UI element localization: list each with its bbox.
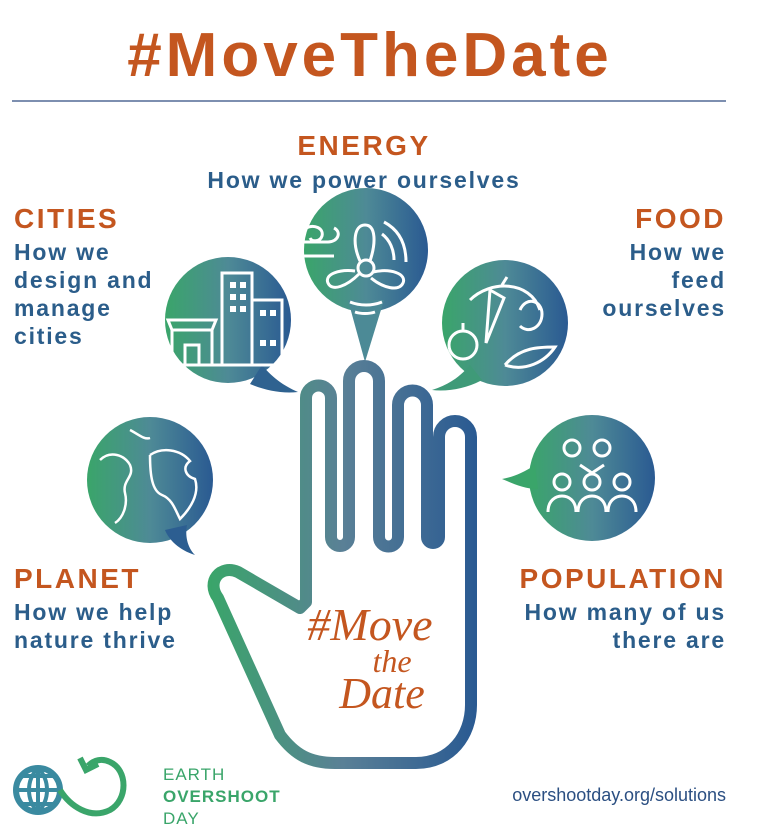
logo icon bbox=[16, 758, 124, 813]
hand slogan: Date bbox=[338, 669, 425, 718]
heading: cities bbox=[14, 203, 153, 349]
heading: cities: CITIES bbox=[14, 203, 119, 234]
heading: population: POPULATION bbox=[520, 563, 726, 594]
hand outline bbox=[214, 366, 471, 763]
bubble: cities bbox=[165, 257, 298, 393]
bubble: planet bbox=[87, 417, 213, 555]
logo text: OVERSHOOT bbox=[163, 787, 281, 806]
heading: population bbox=[520, 563, 726, 653]
url: overshootday.org/solutions bbox=[512, 785, 726, 805]
title: #MoveTheDate bbox=[127, 21, 613, 90]
bubble: energy bbox=[304, 188, 428, 362]
heading: cities: cities bbox=[14, 323, 84, 349]
logo text bbox=[163, 765, 281, 828]
bubble: food bbox=[432, 260, 568, 391]
heading: food: ourselves bbox=[602, 295, 726, 321]
hand slogan bbox=[307, 599, 433, 718]
heading: cities: manage bbox=[14, 295, 112, 321]
heading: food bbox=[602, 203, 726, 321]
heading: cities: How we bbox=[14, 239, 110, 265]
heading: planet: How we help bbox=[14, 599, 173, 625]
heading: planet bbox=[14, 563, 177, 653]
heading: population: there are bbox=[613, 627, 726, 653]
logo text: DAY bbox=[163, 809, 200, 828]
heading: food: feed bbox=[672, 267, 726, 293]
heading: energy: ENERGY bbox=[297, 130, 431, 161]
heading: energy: How we power ourselves bbox=[207, 167, 521, 193]
heading: food: FOOD bbox=[635, 203, 726, 234]
hand slogan: the bbox=[372, 643, 412, 679]
heading: planet: nature thrive bbox=[14, 627, 177, 653]
heading: planet: PLANET bbox=[14, 563, 141, 594]
heading: food: How we bbox=[630, 239, 726, 265]
heading: cities: design and bbox=[14, 267, 153, 293]
bubble: population bbox=[502, 415, 655, 541]
heading: energy bbox=[207, 130, 521, 193]
hand slogan: #Move bbox=[307, 599, 433, 650]
logo text: EARTH bbox=[163, 765, 225, 784]
heading: population: How many of us bbox=[524, 599, 726, 625]
